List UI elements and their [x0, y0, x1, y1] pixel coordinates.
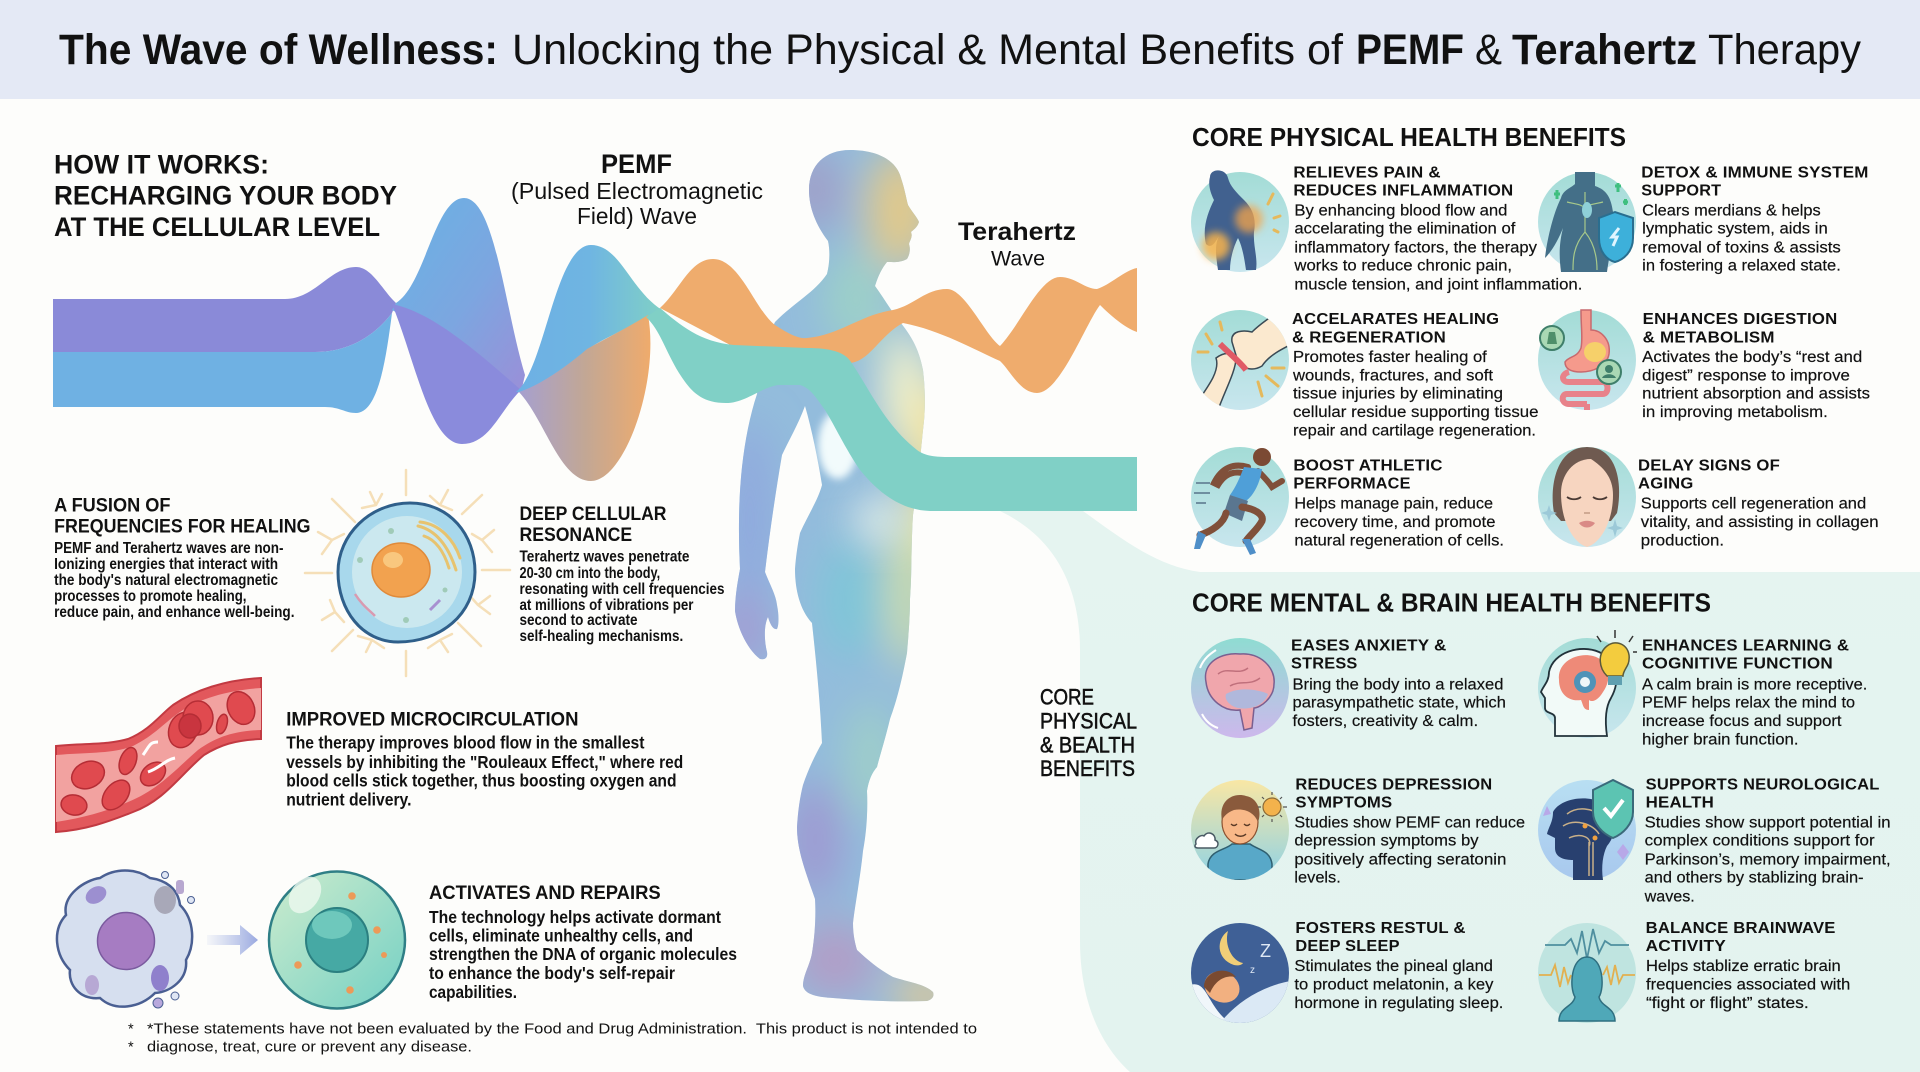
panel: core mental and brain health benefits: [1190, 588, 1891, 1033]
text block: fusion of frequencies: processes to promote healing,: [54, 588, 246, 605]
body silhouette: [735, 150, 934, 1002]
icon: knee joint: [1191, 310, 1289, 410]
title text: Therapy: [1708, 26, 1861, 74]
icon: torso with shield: [1538, 172, 1636, 272]
heading lines: BOOST ATHLETIC: [1293, 458, 1443, 475]
icon: head with gear and bulb: [1538, 630, 1637, 738]
title text: [59, 26, 1861, 74]
benefit: brainwave: ACTIVITY: [1646, 938, 1726, 955]
heading lines: FOSTERS RESTUL &: [1295, 920, 1466, 937]
title text: Unlocking the Physical & Mental Benefits of: [512, 26, 1344, 74]
blue lobe one: [392, 198, 525, 392]
benefit: digestion: in improving metabolism.: [1642, 404, 1828, 421]
benefit: learning: COGNITIVE FUNCTION: [1642, 656, 1833, 673]
title text: Terahertz: [1512, 26, 1697, 74]
footnote disclaimer: *These statements have not been evaluated by the Food and Drug Administration. This product is not intended to: [147, 1021, 977, 1037]
benefit: relieves pain: [1191, 164, 1582, 293]
benefit: anxiety: parasympathetic state, which: [1292, 695, 1506, 712]
benefit: sleep: [1191, 922, 1502, 1023]
benefit: accelerates healing: cellular residue supporting tissue: [1293, 404, 1538, 421]
panel: mental background shape: [1000, 511, 1920, 1072]
benefit: depression: depression symptoms by: [1294, 833, 1479, 850]
text block: improved microcirculation: The therapy improves blood flow in the smallest: [286, 733, 645, 753]
benefit: aging: vitality, and assisting in collagen: [1641, 514, 1879, 531]
benefit: depression: positively affecting seratonin: [1294, 851, 1506, 868]
benefit: learning: increase focus and support: [1642, 713, 1842, 730]
benefit: accelerates healing: tissue injuries by eliminating: [1293, 386, 1503, 403]
benefit: neurological: [1538, 776, 1891, 905]
icon: stomach and intestines: [1538, 310, 1636, 410]
benefit: learning: PEMF helps relax the mind to: [1642, 695, 1855, 712]
illustration: blood vessel: [56, 678, 261, 832]
benefit: sleep: Stimulates the pineal gland: [1294, 958, 1493, 975]
benefit: athletic: recovery time, and promote: [1294, 514, 1495, 531]
text block: activates and repairs: The technology helps activate dormant: [429, 907, 721, 927]
golgi body: [418, 522, 460, 570]
text block: deep cellular resonance: second to activate: [520, 612, 638, 629]
benefit: relieves pain: By enhancing blood flow and: [1294, 202, 1507, 219]
orange terahertz wave: [660, 259, 1137, 393]
footnote disclaimer: [128, 1021, 977, 1056]
text block: activates and repairs: to enhance the body's self-repair: [429, 963, 675, 983]
icon: bent figure with pain glow: [1191, 170, 1289, 272]
text block: deep cellular resonance: [520, 503, 724, 645]
purple lobe: [392, 304, 521, 444]
side label: core physical and bealth benefits: PHYSICAL: [1040, 708, 1137, 734]
heading lines: BALANCE BRAINWAVE: [1646, 920, 1836, 937]
label: PEMF wave: Field) Wave: [577, 203, 697, 229]
arrow: damaged to healthy cell: [207, 925, 258, 955]
text block: fusion of frequencies: reduce pain, and enhance well-being.: [54, 604, 294, 621]
label: PEMF wave: (Pulsed Electromagnetic: [511, 178, 763, 204]
benefit: neurological: Studies show support potential in: [1645, 814, 1891, 831]
heading lines: DETOX & IMMUNE SYSTEM: [1641, 164, 1869, 181]
text block: deep cellular resonance: at millions of vibrations per: [520, 597, 694, 614]
benefit: relieves pain: accelarating the elimination of: [1294, 221, 1516, 238]
benefit: learning: higher brain function.: [1642, 731, 1798, 748]
text block: deep cellular resonance: 20-30 cm into the body,: [520, 565, 660, 582]
text block: fusion of frequencies: A FUSION OF: [54, 494, 171, 516]
benefit: relieves pain: REDUCES INFLAMMATION: [1293, 183, 1513, 200]
text block: deep cellular resonance: RESONANCE: [520, 524, 632, 546]
title bar: [0, 0, 1920, 99]
title text: PEMF: [1356, 26, 1464, 74]
text block: fusion of frequencies: [54, 494, 310, 621]
benefit: sleep: DEEP SLEEP: [1295, 938, 1400, 955]
text block: improved microcirculation: nutrient delivery.: [286, 790, 412, 810]
benefit: anxiety: STRESS: [1291, 656, 1358, 673]
benefit: digestion: Activates the body’s “rest and: [1642, 349, 1862, 366]
text block: improved microcirculation: IMPROVED MICROCIRCULATION: [286, 708, 578, 730]
benefit: digestion: [1538, 310, 1870, 421]
benefit: aging: [1538, 447, 1879, 549]
text block: fusion of frequencies: FREQUENCIES FOR HEALING: [54, 516, 310, 538]
footnote disclaimer: *: [128, 1021, 134, 1037]
label: Terahertz wave: [958, 218, 1076, 270]
text block: deep cellular resonance: Terahertz waves penetrate: [520, 549, 690, 566]
label: Terahertz wave: Terahertz: [958, 218, 1076, 246]
benefit: anxiety: Bring the body into a relaxed: [1292, 676, 1504, 693]
benefit: neurological: Parkinson’s, memory impairment,: [1645, 851, 1891, 868]
benefit: digestion: & METABOLISM: [1643, 329, 1775, 346]
healthy cell nucleus: [306, 908, 368, 972]
benefit: neurological: waves.: [1644, 888, 1695, 905]
label: PEMF wave: [511, 149, 763, 229]
red blood cells: [59, 687, 260, 817]
icon: brain: [1191, 638, 1289, 738]
benefit: sleep: hormone in regulating sleep.: [1294, 995, 1503, 1012]
wave graphic: PEMF and Terahertz waves: [53, 198, 1137, 511]
benefit: depression: [1191, 776, 1525, 887]
icon: sleeping person: z: [1250, 965, 1255, 976]
benefit: accelerates healing: [1191, 308, 1538, 440]
benefit: learning: A calm brain is more receptive.: [1642, 676, 1867, 693]
icon: runner: [1191, 447, 1289, 555]
nucleus: [372, 543, 430, 597]
benefit: athletic: Helps manage pain, reduce: [1294, 496, 1493, 513]
illustration: healthy cell: [269, 871, 405, 1008]
teal wave: [646, 308, 1137, 511]
side label: core physical and bealth benefits: & BEALTH: [1040, 732, 1135, 757]
text block: activates and repairs: [429, 882, 737, 1002]
label: PEMF wave: PEMF: [601, 149, 672, 179]
damaged cell nucleus: [98, 912, 154, 970]
blue lobe two: [516, 245, 662, 392]
cell membrane: [338, 503, 475, 642]
benefit: accelerates healing: wounds, fractures, and soft: [1292, 367, 1494, 384]
benefit: depression: SYMPTOMS: [1295, 795, 1392, 812]
benefit: learning: [1538, 630, 1867, 748]
benefit: relieves pain: inflammatory factors, the therapy: [1294, 239, 1537, 256]
text block: activates and repairs: capabilities.: [429, 982, 517, 1002]
label: Terahertz wave: Wave: [991, 248, 1045, 270]
text block: deep cellular resonance: DEEP CELLULAR: [520, 503, 666, 525]
benefit: detox and immune: in fostering a relaxed state.: [1642, 258, 1841, 275]
benefit: detox and immune: Clears merdians & helps: [1642, 202, 1821, 219]
heading: how it works: AT THE CELLULAR LEVEL: [54, 212, 380, 242]
benefit: depression: levels.: [1294, 870, 1341, 887]
benefit: detox and immune: lymphatic system, aids in: [1642, 221, 1828, 238]
benefit: sleep: to product melatonin, a key: [1294, 976, 1494, 993]
benefit: brainwave: [1538, 920, 1850, 1023]
benefit: athletic: PERFORMACE: [1293, 476, 1411, 493]
heading: how it works: RECHARGING YOUR BODY: [54, 180, 397, 210]
benefit: accelerates healing: Promotes faster healing of: [1293, 349, 1488, 366]
blue band: [53, 313, 392, 413]
benefit: accelerates healing: & REGENERATION: [1292, 329, 1446, 346]
heading lines: DELAY SIGNS OF: [1638, 458, 1780, 475]
heading lines: EASES ANXIETY &: [1291, 637, 1446, 654]
icon: head with shield: [1538, 780, 1636, 880]
text block: fusion of frequencies: PEMF and Terahertz waves are non-: [54, 540, 283, 557]
text block: activates and repairs: strengthen the DNA of organic molecules: [429, 944, 737, 964]
footnote disclaimer: *: [128, 1040, 134, 1056]
benefit: athletic: [1191, 447, 1504, 555]
benefit: brainwave: “fight or flight” states.: [1646, 995, 1809, 1012]
heading lines: ENHANCES LEARNING &: [1642, 637, 1849, 654]
benefit: aging: Supports cell regeneration and: [1641, 496, 1866, 513]
icon: head with waves: [1538, 923, 1636, 1023]
benefit: relieves pain: works to reduce chronic pain,: [1293, 258, 1512, 275]
illustration: damaged cell: [57, 870, 194, 1008]
benefit: aging: AGING: [1638, 476, 1694, 493]
text block: deep cellular resonance: resonating with cell frequencies: [520, 581, 724, 598]
text block: deep cellular resonance: self-healing mechanisms.: [520, 628, 683, 645]
benefit: relieves pain: muscle tension, and joint inflammation.: [1294, 276, 1582, 293]
heading lines: RELIEVES PAIN &: [1293, 164, 1441, 181]
benefit: digestion: digest” response to improve: [1642, 367, 1850, 384]
footnote disclaimer: diagnose, treat, cure or prevent any disease.: [147, 1040, 472, 1056]
text block: fusion of frequencies: Ionizing energies that interact with: [54, 556, 278, 573]
heading: core mental: CORE MENTAL & BRAIN HEALTH BENEFITS: [1192, 588, 1711, 618]
icon: sleeping person: Z: [1260, 941, 1271, 961]
title text: The Wave of Wellness:: [59, 26, 498, 74]
benefit: neurological: complex conditions support for: [1645, 833, 1875, 850]
heading lines: ACCELARATES HEALING: [1292, 311, 1499, 328]
text block: improved microcirculation: vessels by inhibiting the "Rouleaux Effect," where red: [286, 752, 683, 772]
benefit: anxiety: fosters, creativity & calm.: [1292, 713, 1478, 730]
heading: core physical: CORE PHYSICAL HEALTH BENEFITS: [1192, 122, 1626, 152]
side label: core physical and bealth benefits: CORE: [1040, 685, 1094, 710]
mauve lobe: [519, 315, 650, 481]
text block: activates and repairs: cells, eliminate unhealthy cells, and: [429, 925, 693, 945]
heading lines: SUPPORTS NEUROLOGICAL: [1646, 776, 1880, 793]
benefit: digestion: nutrient absorption and assists: [1642, 386, 1870, 403]
benefit: brainwave: Helps stablize erratic brain: [1646, 958, 1841, 975]
text block: improved microcirculation: blood cells stick together, thus boosting oxygen and: [286, 771, 676, 791]
text block: improved microcirculation: [286, 708, 683, 810]
benefit: neurological: and others by stablizing brain-: [1645, 870, 1864, 887]
heading lines: REDUCES DEPRESSION: [1295, 776, 1492, 793]
icon: sleeping person: [1191, 923, 1289, 1023]
purple band: [53, 267, 396, 352]
heading: how it works: [54, 150, 397, 242]
benefit: detox and immune: SUPPORT: [1641, 183, 1721, 200]
heading: how it works: HOW IT WORKS:: [54, 150, 269, 180]
benefit: depression: Studies show PEMF can reduce: [1294, 814, 1525, 831]
benefit: detox and immune: removal of toxins & assists: [1642, 239, 1841, 256]
benefit: anxiety: [1191, 637, 1506, 738]
illustration: glowing cell: [305, 470, 510, 676]
icon: calm face: [1538, 447, 1636, 547]
text block: fusion of frequencies: the body's natural electromagnetic: [54, 572, 278, 589]
benefit: brainwave: frequencies associated with: [1646, 976, 1850, 993]
cell rays: [305, 470, 510, 676]
benefit: detox and immune: [1538, 164, 1869, 275]
text block: activates and repairs: ACTIVATES AND REPAIRS: [429, 882, 661, 904]
title text: &: [1475, 26, 1502, 74]
side label: core physical and bealth benefits: BENEFITS: [1040, 756, 1135, 781]
side label: core physical and bealth benefits: [1040, 685, 1137, 781]
panel: core physical health benefits: [1191, 122, 1879, 555]
icon: person with sun: [1191, 780, 1289, 880]
benefit: neurological: HEALTH: [1646, 795, 1714, 812]
benefit: accelerates healing: repair and cartilage regeneration.: [1293, 423, 1536, 440]
benefit: aging: production.: [1641, 532, 1724, 549]
heading lines: ENHANCES DIGESTION: [1643, 311, 1837, 328]
benefit: athletic: natural regeneration of cells.: [1294, 532, 1504, 549]
